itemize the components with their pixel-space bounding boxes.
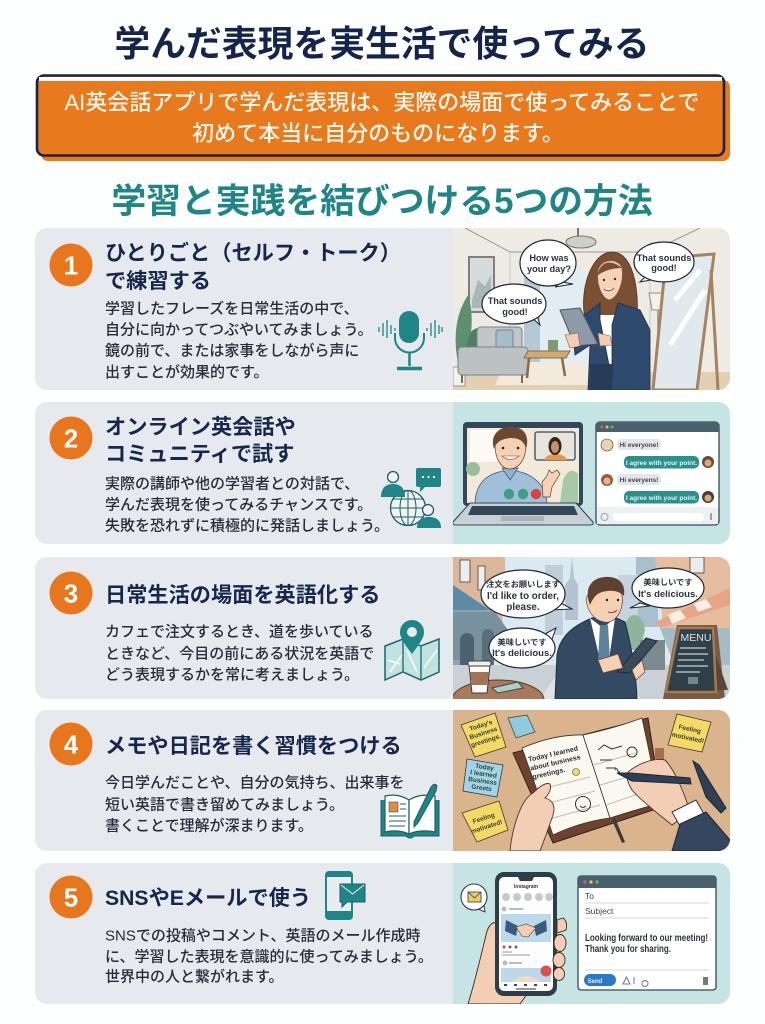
sticky notes: Today <box>475 763 495 772</box>
panel: step 1 self talk <box>35 228 730 390</box>
number badge 1 <box>50 244 92 286</box>
speech bubble: That sounds good right: That sounds <box>637 253 691 263</box>
body text 1: 出すことが効果的です。 <box>105 363 269 381</box>
icon: phone and envelope <box>326 872 365 919</box>
heading 1 <box>105 240 401 293</box>
icon: microphone <box>379 311 442 368</box>
menu board <box>663 625 728 699</box>
open notebook <box>513 718 664 843</box>
body text 5: SNSでの投稿やコメント、英語のメール作成時 <box>105 928 421 944</box>
left hand <box>510 783 554 851</box>
sticky notes: Business <box>468 776 498 787</box>
body text 3: カフェで注文するとき、道を歩いている <box>105 624 374 640</box>
speech bubble: delicious left: It's delicious. <box>492 648 552 659</box>
icon: people and globe <box>381 468 441 528</box>
laptop video call <box>453 422 593 525</box>
email window: Send <box>588 979 603 985</box>
speech bubble: order <box>481 570 572 618</box>
sticky notes <box>461 713 711 842</box>
heading 2: オンライン英会話や <box>105 415 296 439</box>
speech bubble: order: I'd like to order, <box>487 591 559 602</box>
email window: Thank you for sharing. <box>585 944 671 955</box>
number badge 2 <box>50 416 92 460</box>
body text 2: 実際の講師や他の学習者との対話で、 <box>105 474 359 492</box>
speech bubble: That sounds good left: good! <box>502 307 528 317</box>
icon: map with pin <box>385 620 439 680</box>
sticky notes: Feeling <box>678 724 702 735</box>
speech bubble: order: please. <box>506 602 540 613</box>
callout: 初めて本当に自分のものになります。 <box>192 121 564 146</box>
number badge 1: 1 <box>64 250 78 280</box>
sticky notes: motivated! <box>470 819 503 836</box>
body text 4: 書くことで理解が深まります。 <box>105 816 313 834</box>
sticky notes: motivated! <box>671 732 705 745</box>
heading 5: SNSやEメールで使う <box>105 886 311 910</box>
chat window <box>596 422 719 525</box>
heading 2: コミュニティで試す <box>105 442 294 466</box>
panel: step 5 SNS and email <box>35 863 730 1004</box>
sticky notes: I learned <box>470 769 497 780</box>
panel: step 4 notes <box>35 710 730 851</box>
number badge 4 <box>50 722 92 766</box>
chat window: I agree with your point. <box>626 495 697 502</box>
hand behind phone <box>468 923 530 1004</box>
chat window: I agree with your point. <box>626 460 697 467</box>
body text 4 <box>105 774 405 834</box>
illustration: businessman in city cafe <box>453 557 730 699</box>
body text 2: 学んだ表現を使ってみるチャンスです。 <box>105 496 372 514</box>
sticky notes: Greets <box>471 783 493 793</box>
body text 3: どう表現するかを常に考えましょう。 <box>105 666 359 684</box>
body text 5 <box>105 928 433 986</box>
open notebook: about business <box>530 754 581 773</box>
body text 4: 短い英語で書き留めてみましょう。 <box>105 796 344 814</box>
right hand and pen <box>617 760 730 851</box>
body text 3 <box>105 624 374 684</box>
number badge 3 <box>50 572 92 614</box>
subtitle: 学習と実践を結びつける5つの方法 <box>111 182 653 221</box>
open notebook: Today I learned <box>528 745 579 764</box>
speech bubble: delicious left <box>489 628 556 668</box>
speech bubble: order: 注文をお願いします <box>486 579 560 589</box>
email window: Looking forward to our meeting! <box>585 933 708 944</box>
illustration: video call and chat <box>453 402 730 544</box>
sticky notes: Feeling <box>472 812 496 826</box>
businessman <box>555 577 657 699</box>
heading 1: で練習する <box>105 269 211 293</box>
title: 学んだ表現を実生活で使ってみる <box>114 24 650 64</box>
panel: step 3 daily life <box>35 557 730 699</box>
callout: AI英会話アプリで学んだ表現は、実際の場面で使ってみることで <box>64 90 700 115</box>
speech bubble: That sounds good right <box>634 242 694 282</box>
speech bubble: How was your day <box>520 240 576 287</box>
body text 5: 世界中の人と繋がれます。 <box>105 968 284 986</box>
open notebook: greetings. <box>532 767 566 781</box>
number badge 4: 4 <box>64 730 79 760</box>
chat window: Hi everyone! <box>619 442 659 449</box>
number badge 5 <box>50 876 92 918</box>
speech bubble: delicious right: 美味しいです <box>644 577 692 587</box>
speech bubble: delicious left: 美味しいです <box>498 637 546 647</box>
mail speech bubble <box>461 884 487 912</box>
illustration: phone and email <box>453 863 730 1004</box>
illustration: journal and sticky notes <box>453 710 730 851</box>
chat window: Hi everyens! <box>620 477 658 484</box>
body text 1: 鏡の前で、または家事をしながら声に <box>105 342 359 360</box>
heading 3: 日常生活の場面を英語化する <box>105 583 380 607</box>
speech bubble: That sounds good left <box>482 284 546 325</box>
body text 5: に、学習した表現を意識的に使ってみましょう。 <box>105 948 433 966</box>
body text 1: 学習したフレーズを日常生活の中で、 <box>105 300 359 318</box>
body text 3: ときなど、今目の前にある状況を英語で <box>105 646 374 662</box>
email window: To <box>585 891 594 901</box>
email window: Subject <box>585 906 614 916</box>
illustration: woman talking in living room <box>453 228 730 390</box>
sticky notes: Today's <box>469 719 494 733</box>
smartphone: Instagram <box>514 884 538 890</box>
callout <box>37 76 730 161</box>
body text 2 <box>105 474 389 534</box>
smartphone <box>495 872 557 996</box>
speech bubble: That sounds good right: good! <box>651 263 677 273</box>
speech bubble: That sounds good left: That sounds <box>488 296 542 306</box>
menu board: MENU <box>681 632 711 644</box>
coffee cup and table <box>453 660 544 699</box>
body text 1: 自分に向かってつぶやいてみましょう。 <box>105 322 373 338</box>
body text 1 <box>105 300 373 381</box>
speech bubble: delicious right: It's delicious. <box>638 589 698 600</box>
heading 2 <box>105 415 296 466</box>
speech bubble: delicious right <box>630 568 704 608</box>
email window <box>578 876 716 990</box>
sticky notes: Business <box>469 726 499 741</box>
sticky notes: greetings. <box>470 733 502 749</box>
speech bubble: How was your day: How was <box>529 253 569 263</box>
body text 2: 失敗を恐れずに積極的に発話しましょう。 <box>105 518 389 534</box>
number badge 3: 3 <box>64 578 78 608</box>
heading 1: ひとりごと（セルフ・トーク） <box>105 240 401 265</box>
body text 4: 今日学んだことや、自分の気持ち、出来事を <box>105 774 405 792</box>
fingers <box>553 918 567 980</box>
number badge 5: 5 <box>64 882 78 912</box>
icon: open book and pen <box>381 784 439 838</box>
speech bubble: How was your day: your day? <box>527 264 571 274</box>
heading 4: メモや日記を書く習慣をつける <box>105 734 402 758</box>
number badge 2: 2 <box>64 424 78 454</box>
panel: step 2 online <box>35 402 730 544</box>
